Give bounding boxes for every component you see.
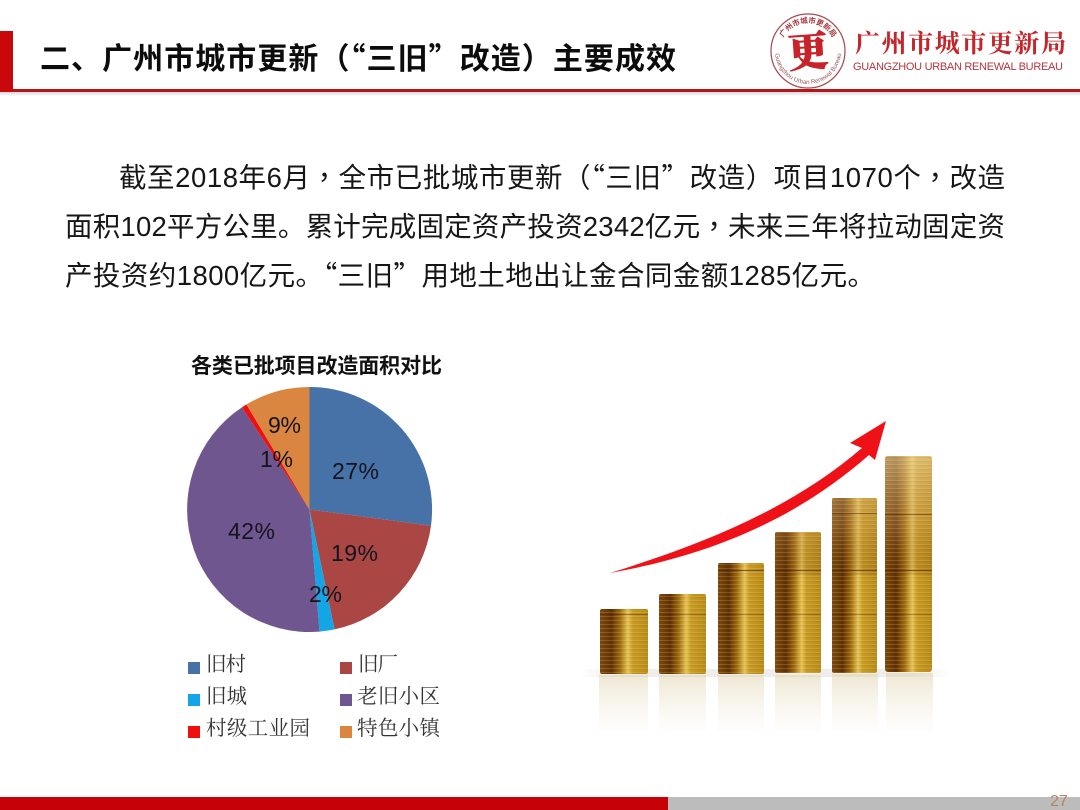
pie value labels: 42% bbox=[228, 518, 275, 544]
illustration: gold coin stacks with rising arrow bbox=[580, 421, 950, 731]
logo emblem bbox=[770, 13, 846, 89]
logo emblem: 广州市城市更新局 bbox=[780, 16, 837, 38]
pie value labels: 9% bbox=[268, 412, 301, 438]
coin stack 6 bbox=[885, 456, 932, 672]
legend: 旧村: 旧村 bbox=[206, 653, 246, 676]
legend: 旧厂 bbox=[340, 654, 398, 676]
coin stack 4 bbox=[775, 532, 821, 673]
slice: 特色小镇 9% bbox=[246, 387, 310, 510]
legend: 老旧小区: 老旧小区 bbox=[357, 685, 440, 708]
legend: 旧村 bbox=[188, 653, 246, 676]
body paragraph: 面积102平方公里。累计完成固定资产投资2342亿元，未来三年将拉动固定资 bbox=[65, 204, 1005, 244]
logo: Guangzhou Urban Renewal Bureau bbox=[770, 13, 1066, 89]
legend: 旧厂: 旧厂 bbox=[358, 654, 398, 676]
header band bbox=[0, 31, 1080, 96]
slice: 旧城 2% bbox=[310, 510, 334, 632]
pie value labels bbox=[228, 412, 379, 607]
chart title: 各类已批项目改造面积对比 bbox=[191, 354, 442, 378]
coin stack 5 bbox=[832, 498, 877, 673]
logo emblem: 更 bbox=[786, 28, 830, 76]
body paragraph: 产投资约1800亿元。“三旧”用地土地出让金合同金额1285亿元。 bbox=[65, 253, 875, 293]
body paragraph: 截至2018年6月，全市已批城市更新（“三旧”改造）项目1070个，改造 bbox=[119, 155, 1005, 195]
legend: 旧城: 旧城 bbox=[206, 685, 247, 708]
slice: 旧厂 19% bbox=[310, 510, 431, 629]
pie value labels: 27% bbox=[332, 458, 379, 484]
legend bbox=[188, 653, 442, 740]
logo wordmark: 广州市城市更新局 bbox=[855, 30, 1066, 58]
pie chart bbox=[187, 387, 432, 632]
slice: 村级工业园 1% bbox=[242, 404, 310, 510]
logo english name: GUANGZHOU URBAN RENEWAL BUREAU bbox=[853, 61, 1063, 73]
legend: 旧城 bbox=[188, 685, 247, 708]
slice: 旧村 27% bbox=[310, 387, 432, 526]
footer bar bbox=[0, 797, 1080, 810]
legend: 村级工业园: 村级工业园 bbox=[206, 717, 310, 740]
pie value labels: 2% bbox=[309, 581, 342, 607]
body paragraph bbox=[65, 155, 1005, 293]
legend: 特色小镇: 特色小镇 bbox=[357, 717, 442, 740]
page number: 27 bbox=[1050, 793, 1068, 810]
coin reflections bbox=[599, 673, 933, 731]
pie value labels: 1% bbox=[260, 446, 293, 472]
coin stack 1 bbox=[600, 609, 648, 674]
floor shadow bbox=[580, 669, 950, 677]
logo emblem: Guangzhou Urban Renewal Bureau bbox=[775, 54, 841, 84]
coin stack 3 bbox=[718, 563, 764, 674]
pie value labels: 19% bbox=[331, 540, 378, 566]
coin stack 2 bbox=[659, 594, 706, 674]
red rising arrow bbox=[610, 421, 886, 573]
title: 二、广州市城市更新（“三旧”改造）主要成效 bbox=[40, 34, 676, 78]
slice: 老旧小区 42% bbox=[187, 407, 320, 632]
